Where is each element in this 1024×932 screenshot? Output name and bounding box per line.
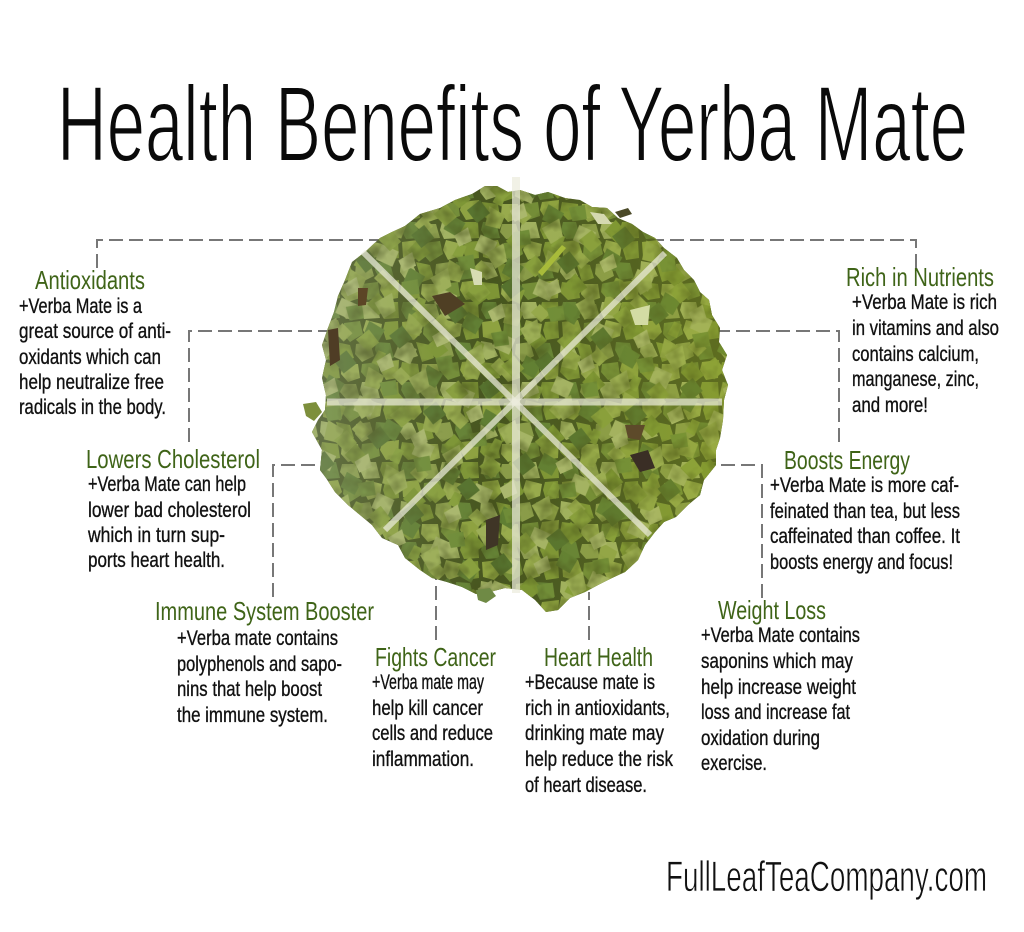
callout: Rich in Nutrients: contains calcium, [852, 343, 979, 366]
callout: Heart Health: help reduce the risk [525, 748, 673, 771]
callout: Rich in Nutrients [846, 262, 999, 417]
leader lines [97, 240, 916, 640]
callout: Fights Cancer: +Verba mate may [372, 671, 484, 694]
callout: Antioxidants [19, 265, 171, 419]
callout: Immune System Booster: +Verba mate contains [177, 627, 338, 650]
callout: Weight Loss [701, 595, 860, 775]
callout: Fights Cancer: cells and reduce [372, 722, 493, 745]
callout: Lowers Cholesterol: ports heart health. [88, 549, 225, 572]
callout: Heart Health: rich in antioxidants, [525, 697, 670, 720]
callout: Antioxidants: radicals in the body. [19, 396, 166, 419]
callout: Antioxidants: great source of anti- [19, 320, 171, 343]
callout: Lowers Cholesterol [86, 444, 260, 572]
callout: Fights Cancer: Fights Cancer [375, 642, 496, 672]
callout: Rich in Nutrients: manganese, zinc, [852, 368, 979, 391]
callout: Lowers Cholesterol: +Verba Mate can help [88, 473, 246, 496]
callout: Antioxidants: help neutralize free [19, 371, 164, 394]
callout: Heart Health: Heart Health [544, 642, 653, 672]
callout: Antioxidants: +Verba Mate is a [19, 295, 142, 318]
callout: Immune System Booster: polyphenols and sapo- [177, 653, 342, 676]
callout: Boosts Energy: caffeinated than coffee. It [770, 525, 960, 548]
callout: Weight Loss: exercise. [701, 752, 767, 775]
callout: Boosts Energy: Boosts Energy [784, 445, 910, 475]
icon: stray leaf top right [615, 208, 632, 218]
callout: Weight Loss: Weight Loss [718, 595, 826, 625]
callout: Fights Cancer [372, 642, 496, 771]
icon: stray leaf left [303, 402, 322, 421]
callout: Lowers Cholesterol: which in turn sup- [87, 524, 225, 547]
callout: Heart Health [525, 642, 673, 797]
callout: Boosts Energy: +Verba Mate is more caf- [770, 474, 959, 497]
callout: Antioxidants: Antioxidants [35, 265, 145, 295]
callout: Fights Cancer: help kill cancer [372, 697, 483, 720]
callout: Weight Loss: help increase weight [701, 676, 856, 699]
icon: stray leaf bottom [476, 588, 496, 603]
callout: Weight Loss: saponins which may [701, 650, 853, 673]
callout: Heart Health: +Because mate is [525, 671, 655, 694]
callout: Heart Health: of heart disease. [525, 774, 647, 797]
callout: Lowers Cholesterol: Lowers Cholesterol [86, 444, 260, 474]
callout: Immune System Booster: Immune System Booster [155, 596, 374, 626]
circle of yerba mate leaves [295, 175, 735, 620]
callout: Rich in Nutrients: and more! [852, 394, 928, 417]
callout: Immune System Booster: nins that help boost [177, 678, 322, 701]
callout: Immune System Booster: the immune system. [177, 704, 328, 727]
callout: Weight Loss: loss and increase fat [701, 701, 850, 724]
callout: Weight Loss: oxidation during [701, 727, 820, 750]
callout: Weight Loss: +Verba Mate contains [701, 624, 860, 647]
callout: Heart Health: drinking mate may [525, 722, 664, 745]
spokes dividing the circle [327, 177, 722, 593]
callout: Immune System Booster [155, 596, 374, 727]
callout: Fights Cancer: inflammation. [372, 748, 474, 771]
callout: Boosts Energy [770, 445, 960, 574]
callout: Boosts Energy: feinated than tea, but less [770, 500, 960, 523]
callout: Boosts Energy: boosts energy and focus! [770, 551, 953, 574]
callout: Lowers Cholesterol: lower bad cholesterol [88, 499, 251, 522]
callout: Antioxidants: oxidants which can [19, 346, 161, 369]
